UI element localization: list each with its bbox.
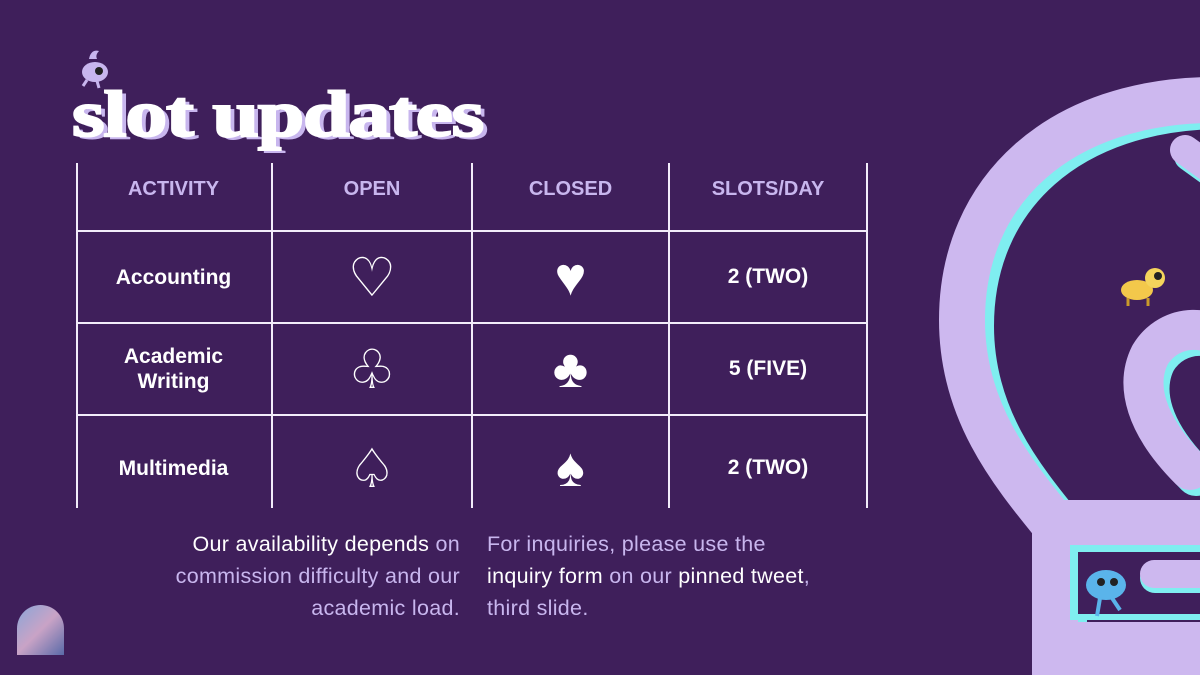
icon: mascot: [82, 50, 108, 88]
table: SLOTS/DAY: [712, 178, 824, 200]
table: [76, 163, 868, 508]
blue creature: [1086, 570, 1126, 616]
header row: ACTIVITY: [128, 178, 219, 200]
table: OPEN: [344, 178, 400, 200]
text: availability note: Our availability depends on commission difficulty and our academic load.: [176, 532, 460, 620]
text: inquiries note: For inquiries, please use the inquiry form on our pinned tweet, third slide.: [487, 532, 810, 620]
table: ♠: [556, 438, 585, 498]
icon: logo: [17, 605, 64, 655]
table: 2 (TWO): [728, 456, 808, 479]
yellow dog: [1121, 268, 1165, 306]
table: ♤: [348, 438, 396, 498]
table: CLOSED: [529, 178, 612, 200]
row: multimedia: Multimedia: [119, 456, 228, 480]
row: accounting: Accounting: [116, 266, 231, 288]
table: ♡: [348, 248, 396, 308]
row: academic writing: [124, 345, 223, 393]
table: ♧: [348, 340, 396, 400]
table: ♣: [553, 339, 588, 399]
table: 5 (FIVE): [729, 357, 807, 380]
table: ♥: [554, 247, 587, 307]
row: academic writing: Writing: [138, 370, 209, 393]
title: slot updates: [72, 78, 483, 151]
row: academic writing: Academic: [124, 345, 223, 368]
table: 2 (TWO): [728, 265, 808, 288]
